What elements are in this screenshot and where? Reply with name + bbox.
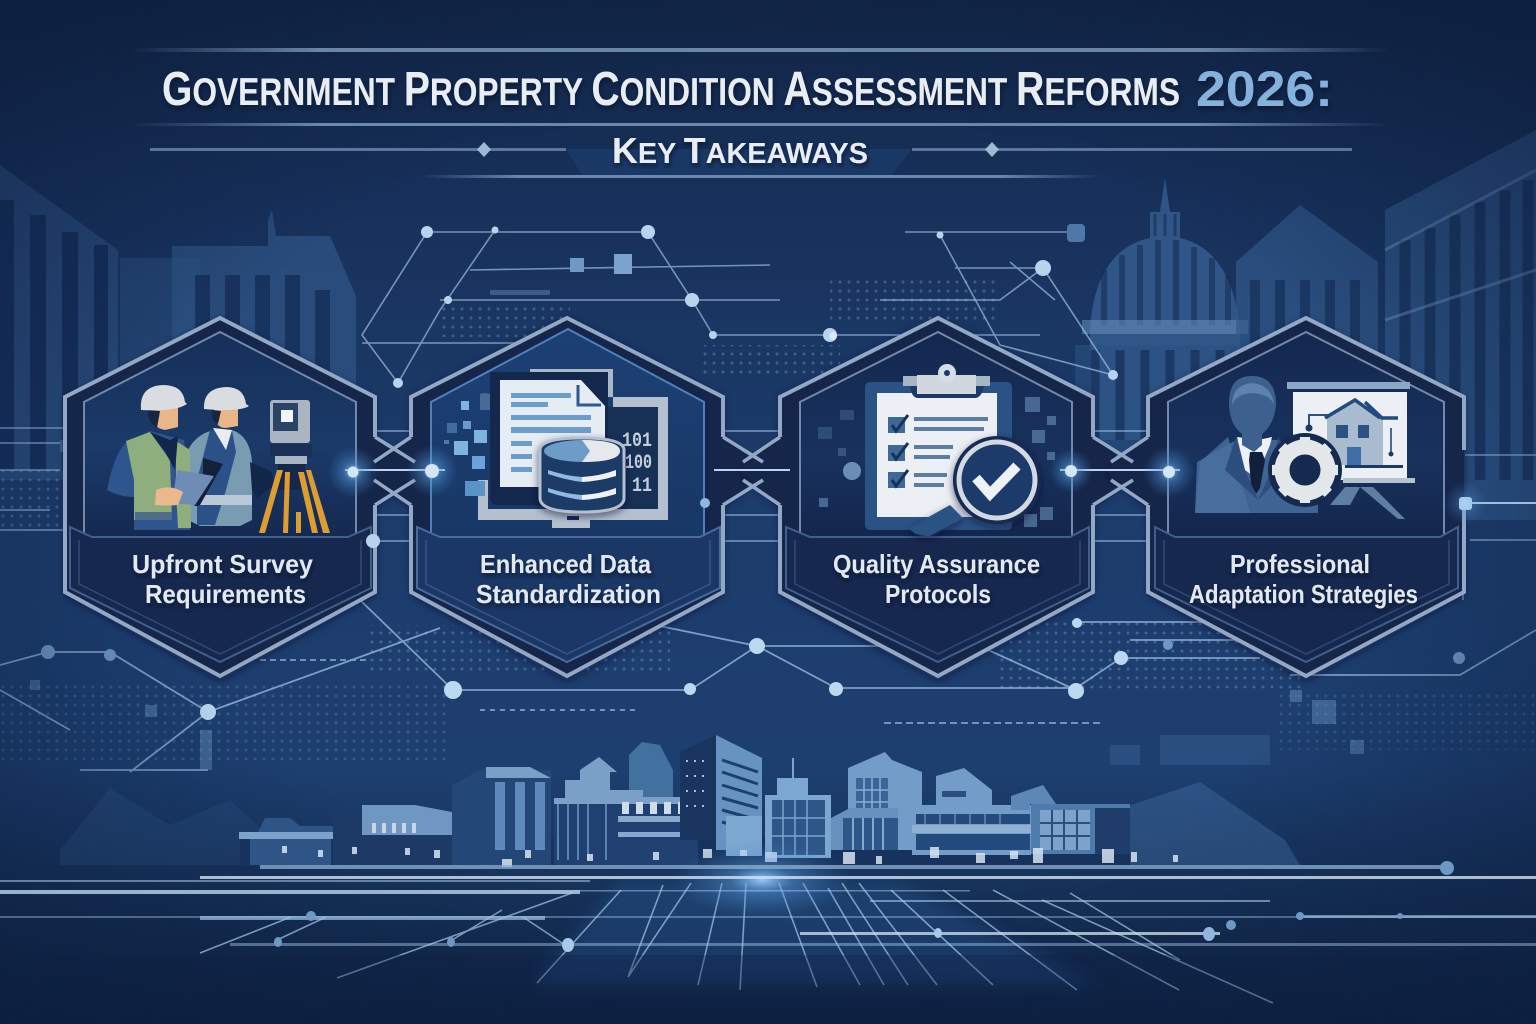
street lights (282, 846, 1178, 867)
radial road lines (200, 883, 1273, 1003)
binary digits: 101 (622, 430, 652, 453)
right hills (1122, 782, 1300, 865)
building a (239, 818, 347, 865)
building b (333, 805, 502, 865)
header rule lines (130, 48, 1390, 178)
background: network nodes lower (41, 618, 1465, 720)
hexagon frame 2 (370, 316, 766, 678)
binary digits: 100 (625, 452, 652, 475)
icon: clipboard with checklist (865, 364, 1012, 530)
background squares 3 (818, 397, 1056, 527)
total station on tripod (259, 400, 330, 533)
skyline base (240, 838, 1130, 866)
binary digits: 11 (632, 475, 652, 498)
database cylinder (540, 438, 624, 512)
label 2 (476, 549, 661, 609)
label 1: Requirements (145, 579, 306, 609)
banner 1 (70, 527, 371, 662)
label 2: Standardization (476, 579, 661, 609)
city skyline (60, 735, 1300, 867)
icon: surveyors with total station (107, 385, 330, 533)
hexagon frame 1 (65, 316, 418, 678)
building i (912, 768, 1031, 855)
icon: businessman silhouette (1195, 376, 1318, 513)
panel: professional adaptation strategies (1105, 316, 1464, 678)
building j (1011, 785, 1130, 854)
building d (554, 757, 698, 865)
label 2: Enhanced Data (480, 549, 651, 579)
label 3: Quality Assurance (833, 549, 1040, 579)
icon: presentation board with house (1287, 382, 1415, 519)
subtitle ribbon with Key Takeaways: KEY TAKEAWAYS (612, 130, 868, 171)
icon: magnifying glass with check (909, 436, 1041, 536)
building c (452, 767, 551, 865)
panel: quality assurance protocols (739, 316, 1136, 678)
label 4: Adaptation Strategies (1189, 579, 1418, 609)
binary digits (622, 430, 652, 498)
perspective road grid (0, 842, 1536, 1003)
label 4 (1189, 549, 1418, 609)
background: capitol dome and buildings right (1075, 130, 1536, 520)
data squares (444, 393, 490, 496)
building e (629, 742, 673, 830)
left hills (60, 788, 300, 865)
background: dot matrix textures (0, 280, 1536, 760)
title: 2026: (1196, 61, 1333, 117)
label 3 (833, 549, 1040, 609)
label 4: Professional (1230, 549, 1370, 579)
banner 4 (1155, 527, 1458, 662)
banner 3 (786, 527, 1089, 662)
subtitle ribbon with Key Takeaways (150, 130, 1352, 175)
panel: upfront survey requirements (65, 316, 418, 678)
surveyor rear (188, 387, 274, 526)
background: network nodes upper (393, 224, 1118, 388)
label 3: Protocols (885, 579, 991, 609)
hexagon frame 3 (739, 316, 1136, 678)
document (500, 380, 605, 487)
surveyor front (107, 385, 191, 530)
glowing horizon (672, 842, 852, 918)
label 1: Upfront Survey (132, 549, 314, 579)
icon: gear (1258, 423, 1352, 517)
horizon traces (0, 865, 1536, 946)
title: GOVERNMENT PROPERTY CONDITION ASSESSMENT REFORMS (162, 63, 1180, 116)
back folder and monitor (478, 369, 668, 528)
label 1 (132, 549, 314, 609)
building h (831, 752, 922, 850)
connectors between hexagons (345, 437, 1180, 505)
building f (680, 735, 762, 856)
glowing nodes on the central line (327, 445, 1536, 548)
hexagon frame 4 (1105, 316, 1464, 678)
background: circuit network upper (362, 230, 1113, 383)
background: circuit network lower (0, 600, 1536, 772)
background: government buildings left (0, 165, 356, 480)
road sheen (530, 882, 1100, 985)
clipboard and tablet (155, 458, 223, 506)
banner 2 (417, 527, 720, 662)
background: scattered data squares (30, 440, 1364, 770)
background: mid horizontal traces (0, 428, 1536, 600)
road nodes (274, 861, 1454, 952)
panel: enhanced data standardization (370, 316, 766, 678)
bottom fade (0, 955, 1536, 1024)
icon: document, database and binary monitor (444, 369, 668, 528)
building g (765, 758, 831, 858)
